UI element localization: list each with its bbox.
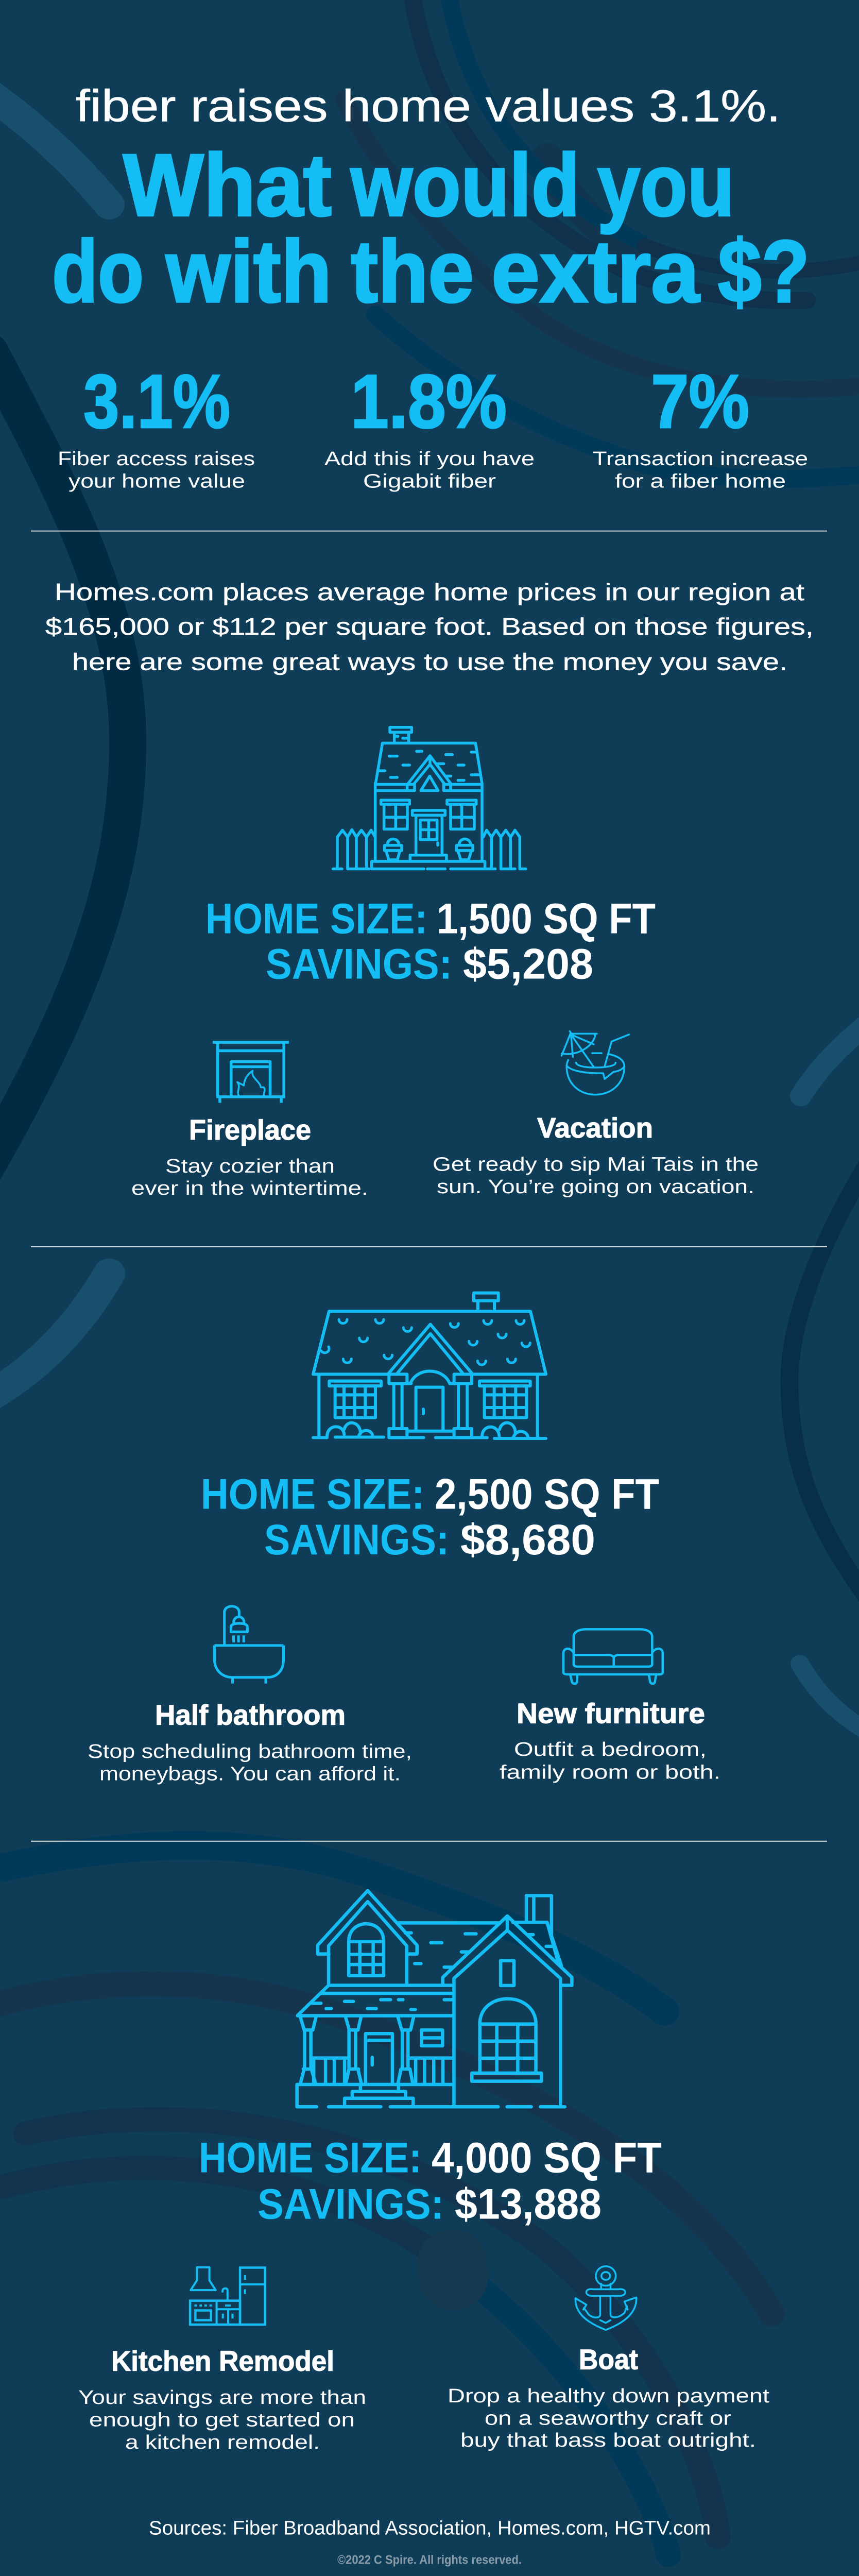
heading: home size and savings: [199, 2134, 662, 2228]
title: $?: [718, 222, 810, 321]
item: fireplace: [131, 1042, 368, 1199]
item: boat: [448, 2266, 769, 2451]
item: vacation: Get ready to sip Mai Tais in the: [433, 1154, 759, 1175]
heading: home size and savings: [201, 1470, 659, 1564]
item: new furniture: [500, 1629, 720, 1783]
stat: 3.1%: your home value: [68, 470, 245, 492]
item: half bathroom: Stop scheduling bathroom time,: [88, 1741, 412, 1762]
stat: 7%: 7%: [651, 360, 749, 444]
item: boat: on a seaworthy craft or: [485, 2408, 731, 2429]
stat: 7%: for a fiber home: [615, 470, 786, 492]
title: you: [597, 136, 734, 234]
stat: 1.8%: Gigabit fiber: [363, 470, 496, 492]
item: new furniture: New furniture: [517, 1698, 705, 1729]
heading: home size and savings: HOME SIZE:: [205, 895, 427, 943]
heading: home size and savings: 1,500 SQ FT: [437, 895, 656, 943]
heading: home size and savings: 2,500 SQ FT: [435, 1470, 659, 1518]
item: kitchen remodel: Your savings are more than: [78, 2387, 366, 2409]
title: What: [123, 136, 332, 234]
item: new furniture: Outfit a bedroom,: [514, 1739, 707, 1760]
heading: home size and savings: SAVINGS:: [257, 2180, 444, 2228]
item: vacation: Vacation: [537, 1112, 653, 1144]
icon: fireplace: [213, 1042, 289, 1103]
item: half bathroom: [88, 1606, 412, 1785]
stat: 1.8%: 1.8%: [351, 360, 507, 444]
stat: 7%: Transaction increase: [593, 448, 808, 470]
stat: 3.1%: [58, 360, 255, 492]
item: fireplace: Stay cozier than: [165, 1156, 335, 1177]
heading: home size and savings: HOME SIZE:: [199, 2134, 422, 2182]
item: fireplace: Fireplace: [189, 1114, 311, 1145]
icon: wide cottage house: [313, 1293, 546, 1438]
stat: 1.8%: [324, 360, 535, 492]
copyright: ©2022 C Spire. All rights reserved.: [337, 2553, 522, 2567]
stat: 3.1%: Fiber access raises: [58, 448, 255, 470]
item: new furniture: family room or both.: [500, 1762, 720, 1783]
icon: anchor: [575, 2266, 637, 2330]
icon: coconut drink: [562, 1031, 629, 1095]
item: kitchen remodel: enough to get started on: [89, 2409, 355, 2431]
title: would: [350, 136, 580, 234]
title: extra: [491, 222, 700, 321]
title: the: [351, 222, 474, 321]
intro paragraph: [45, 579, 814, 675]
title: do: [52, 222, 144, 321]
heading: home size and savings: $13,888: [455, 2180, 602, 2228]
item: boat: buy that bass boat outright.: [460, 2430, 756, 2451]
title: with: [165, 222, 332, 321]
panel: 4,000 sq ft home: [78, 1891, 769, 2453]
icon: large two-story house: [297, 1891, 572, 2107]
sources: Sources: Fiber Broadband Association, Homes.com, HGTV.com: [149, 2518, 711, 2539]
panel: 2,500 sq ft home: [88, 1293, 720, 1785]
heading: home size and savings: $5,208: [463, 940, 593, 988]
item: fireplace: ever in the wintertime.: [131, 1178, 368, 1199]
item: vacation: [433, 1031, 759, 1198]
icon: kitchen: [190, 2267, 265, 2325]
stat: 7%: [593, 360, 808, 492]
heading: home size and savings: [205, 895, 656, 988]
item: half bathroom: Half bathroom: [155, 1699, 346, 1731]
panel: 1,500 sq ft home: [131, 727, 759, 1199]
heading: home size and savings: SAVINGS:: [266, 940, 452, 988]
item: boat: Boat: [579, 2344, 638, 2375]
icon: sofa: [563, 1629, 663, 1684]
item: vacation: sun. You’re going on vacation.: [437, 1176, 754, 1198]
heading: home size and savings: 4,000 SQ FT: [432, 2134, 662, 2182]
icon: small house with fence: [333, 727, 526, 869]
item: half bathroom: moneybags. You can afford it.: [99, 1763, 401, 1785]
intro paragraph: here are some great ways to use the money you save.: [72, 649, 787, 675]
stat: 1.8%: Add this if you have: [324, 448, 535, 470]
item: kitchen remodel: [78, 2267, 366, 2453]
intro paragraph: Homes.com places average home prices in our region at: [55, 579, 804, 606]
intro paragraph: $165,000 or $112 per square foot. Based on those figures,: [45, 614, 814, 640]
item: kitchen remodel: Kitchen Remodel: [111, 2345, 334, 2377]
title: [52, 136, 810, 321]
heading: home size and savings: SAVINGS:: [264, 1516, 449, 1564]
tagline: fiber raises home values 3.1%.: [76, 81, 781, 131]
item: kitchen remodel: a kitchen remodel.: [125, 2432, 320, 2453]
stat: 3.1%: 3.1%: [83, 360, 230, 444]
item: boat: Drop a healthy down payment: [448, 2385, 769, 2407]
heading: home size and savings: HOME SIZE:: [201, 1470, 424, 1518]
icon: bathtub with shower: [215, 1606, 284, 1684]
stats row: [58, 360, 808, 492]
heading: home size and savings: $8,680: [460, 1516, 595, 1564]
